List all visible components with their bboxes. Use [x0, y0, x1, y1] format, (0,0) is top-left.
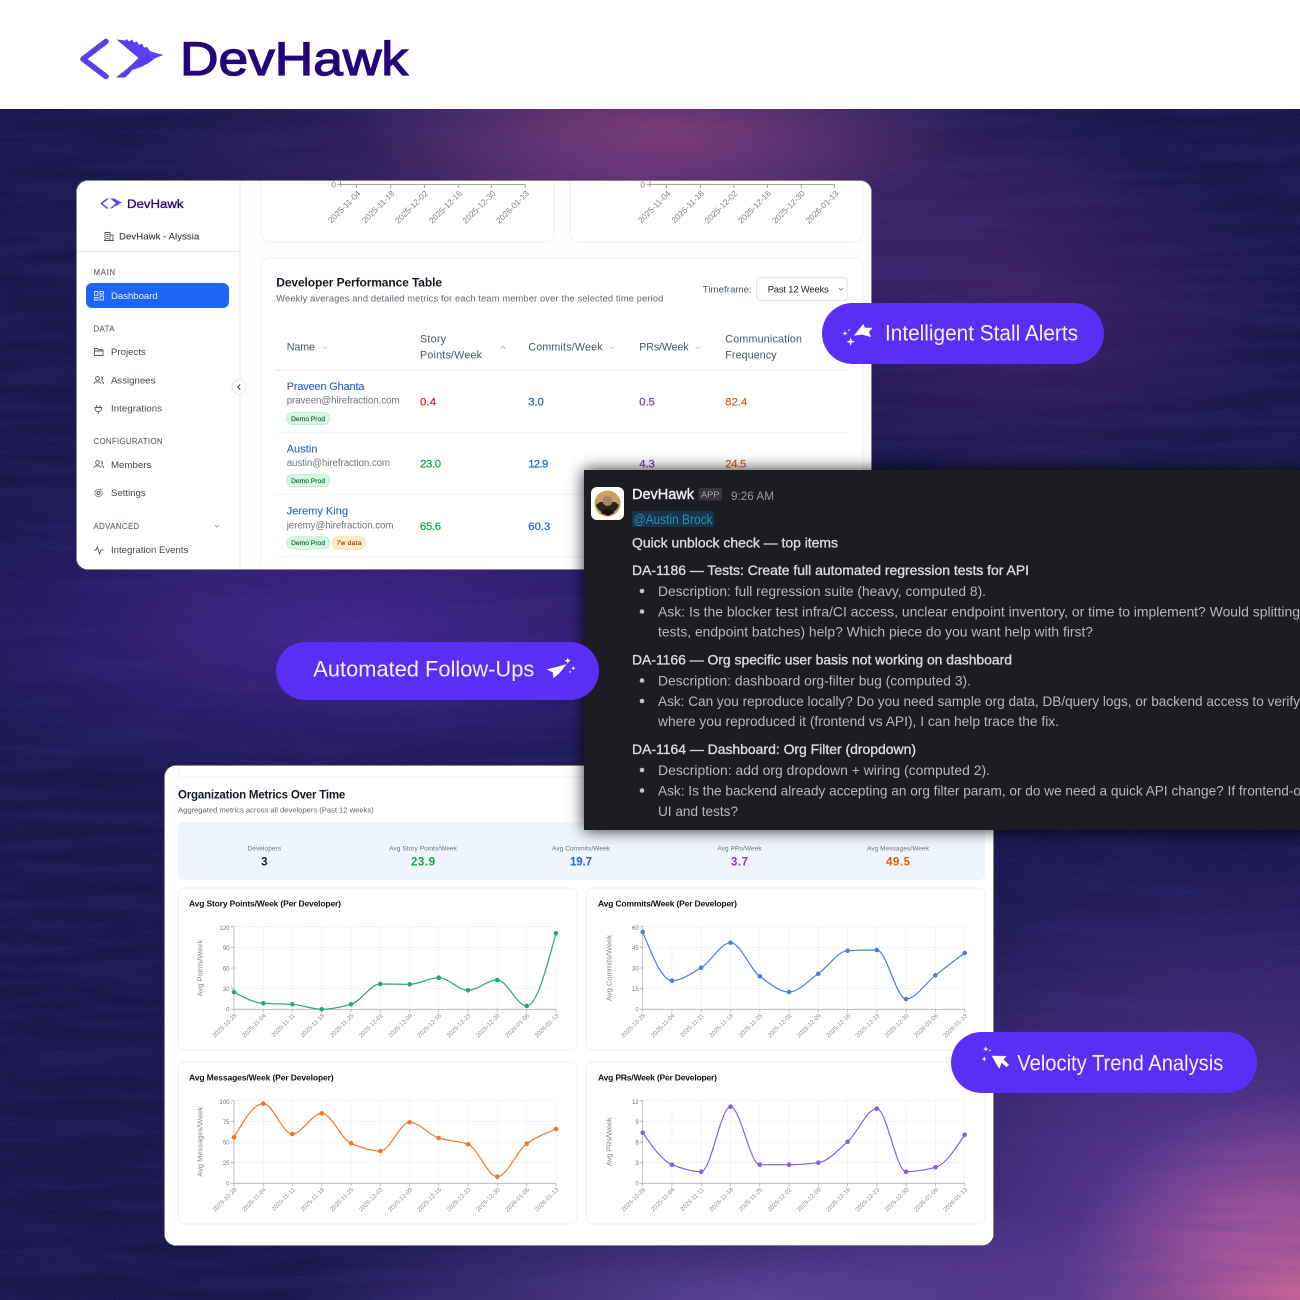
- timeframe select: Timeframe:: [703, 285, 752, 296]
- chart card: avg messages: 2025-11-18: [299, 1186, 327, 1213]
- nav item: Settings: [94, 488, 146, 498]
- stat: story points: [389, 846, 458, 869]
- table row: Austin: [276, 444, 746, 494]
- table description: Weekly averages and detailed metrics for each team member over the selected time period: [276, 294, 663, 304]
- sender line: 9:26 AM: [731, 489, 774, 503]
- table row: Praveen Ghanta: Praveen Ghanta: [287, 381, 365, 393]
- chart card: avg PRs: 12: [632, 1100, 639, 1106]
- chart card: avg PRs: 6: [635, 1140, 639, 1146]
- ticket DA-1186: Ask: Is the blocker test infra/CI access, unclear endpoint inventory, or time to implement? Would splitting: [658, 604, 1300, 620]
- wordmark: DevHawk: [180, 32, 409, 85]
- stat: developers: 3: [261, 857, 268, 869]
- chart card: avg commits: 15: [632, 987, 639, 993]
- collapse button: [232, 380, 246, 394]
- chart card: avg story points: 2025-11-25: [329, 1012, 356, 1039]
- nav item: Assignees: Assignees: [111, 376, 156, 386]
- chart stub: right card axis: 2026-01-13: [803, 188, 841, 225]
- table row: Jeremy King: 7w data: [336, 540, 362, 547]
- ticket DA-1166: where you reproduced it (frontend vs API), I can help trace the fix.: [657, 713, 1059, 729]
- chart stub: left card axis: 2025-11-18: [360, 188, 397, 225]
- chart card: avg story points: 120: [219, 926, 230, 932]
- chart card: avg commits: 45: [632, 946, 639, 952]
- stat: story points: Avg Story Points/Week: [389, 846, 458, 853]
- chart stub: right card axis: 2025-11-18: [669, 188, 706, 225]
- panel: dashboard table window: [76, 180, 872, 570]
- chart card: avg story points: 2025-11-11: [270, 1012, 297, 1039]
- nav heading with chevron: [93, 522, 220, 530]
- chart card: avg messages: 100: [219, 1100, 230, 1106]
- chart card: avg story points: 2025-11-18: [299, 1012, 327, 1039]
- chart stub: left card axis: 2025-12-02: [393, 188, 430, 225]
- table header row: Communication: [725, 334, 802, 346]
- ticket DA-1186: [632, 562, 1300, 640]
- chart stub: right card axis: 2025-12-16: [736, 188, 773, 225]
- sender line: [632, 486, 774, 503]
- table header row: Commits/Week: [528, 342, 603, 354]
- summary band: [178, 822, 985, 880]
- ticket DA-1164: UI and tests?: [658, 803, 738, 819]
- table row: Austin: 23.0: [420, 459, 441, 471]
- nav item: Settings: Settings: [111, 488, 146, 499]
- chart card: avg commits: 2025-11-11: [679, 1012, 706, 1039]
- stat: PRs: 3.7: [731, 857, 748, 869]
- chart stub: right card axis: 2025-12-02: [702, 188, 740, 225]
- section description: Aggregated metrics across all developers (Past 12 weeks): [178, 805, 374, 814]
- table row: Praveen Ghanta: 0.5: [639, 397, 655, 409]
- chart card: avg messages: 2025-12-16: [416, 1186, 444, 1213]
- nav item: Projects: [94, 348, 146, 357]
- panel: Slack message: [584, 470, 1300, 830]
- table row: Jeremy King: [276, 506, 848, 557]
- nav heading: CONFIGURATION: [94, 437, 162, 446]
- chart card: avg PRs: 2025-12-23: [854, 1186, 882, 1213]
- chart card: avg story points: 2025-10-28: [211, 1012, 239, 1039]
- icon: sparkle arrow: [843, 324, 873, 346]
- chart card: avg PRs: 2025-11-25: [738, 1186, 765, 1213]
- bot avatar: [591, 487, 624, 520]
- nav item: Dashboard active: [86, 283, 229, 308]
- stat: commits: 19.7: [570, 857, 592, 869]
- table row: Austin: Austin: [287, 443, 317, 455]
- chart card: avg commits: 2026-01-13: [942, 1012, 970, 1039]
- chart card: avg messages: 2025-12-02: [358, 1186, 385, 1213]
- ticket DA-1164: Ask: Is the backend already accepting an org filter param, or do we need a quick API change? If frontend-o: [658, 782, 1300, 798]
- stat: story points: 23.9: [411, 857, 435, 869]
- nav item: Members: Members: [111, 460, 152, 471]
- stat: developers: Developers: [247, 846, 282, 853]
- chart card: avg commits: 2025-12-16: [825, 1012, 852, 1039]
- chart card: avg story points: 2025-12-16: [416, 1012, 444, 1039]
- chart stub: left card axis: 2025-12-16: [427, 188, 464, 225]
- ticket DA-1166: Description: dashboard org-filter bug (computed 3).: [658, 672, 971, 688]
- chart stub: left card axis: 2025-12-30: [460, 188, 498, 225]
- message intro: Quick unblock check — top items: [632, 534, 838, 550]
- chart card: avg story points: 2025-12-02: [358, 1012, 385, 1039]
- stat: developers: [247, 846, 282, 869]
- ticket DA-1166: [632, 652, 1300, 729]
- mention: @Austin Brock: [634, 511, 713, 527]
- callout: Intelligent Stall Alerts: Intelligent Stall Alerts: [885, 321, 1078, 346]
- panel: developer performance table: [261, 258, 863, 598]
- table row: Praveen Ghanta: praveen@hirefraction.com: [287, 396, 399, 407]
- ticket DA-1164: Description: add org dropdown + wiring (computed 2).: [658, 762, 990, 778]
- table row: Praveen Ghanta: 82.4: [725, 397, 747, 409]
- chart card: avg messages: [178, 1062, 577, 1224]
- chart card: avg messages: 2025-12-23: [445, 1186, 473, 1213]
- table row: Austin: 12.9: [528, 459, 548, 471]
- table row: Praveen Ghanta: Demo Prod: [291, 416, 325, 423]
- ticket DA-1186: Description: full regression suite (heavy, computed 8).: [658, 583, 986, 599]
- table row: Austin: 24.5: [725, 459, 746, 471]
- table row: Austin: austin@hirefraction.com: [287, 458, 390, 469]
- chart card: avg commits: 2025-11-04: [650, 1012, 677, 1039]
- nav item: Assignees: [94, 376, 155, 386]
- ticket DA-1166: DA-1166 — Org specific user basis not working on dashboard: [632, 652, 1012, 668]
- chart card: avg messages: 25: [223, 1161, 230, 1167]
- chart card: avg commits: 2025-12-09: [796, 1012, 823, 1039]
- ticket DA-1166: Ask: Can you reproduce locally? Do you need sample org data, DB/query logs, or backend access to verify: [658, 693, 1300, 709]
- chart card: avg story points: [178, 888, 577, 1050]
- table row: Jeremy King: 60.3: [528, 521, 550, 533]
- nav heading: MAIN: [94, 268, 115, 277]
- chart card: avg PRs: 2025-12-02: [766, 1186, 794, 1213]
- chart card: avg PRs: Avg PRs/Week (Per Developer): [598, 1073, 717, 1083]
- chart card: avg messages: 2025-11-04: [241, 1186, 268, 1213]
- table row: Austin: Demo Prod: [291, 478, 325, 485]
- chart card: avg commits: Avg Commits/Week: [604, 935, 614, 1001]
- chart card: avg messages: 50: [223, 1140, 230, 1146]
- panel: organization metrics window: [164, 740, 994, 1246]
- chart stub: left card axis: 0: [331, 180, 336, 190]
- chart card: avg story points: Avg Points/Week: [196, 939, 204, 996]
- chart card: avg messages: 2025-12-09: [387, 1186, 415, 1213]
- nav item: Members: [94, 460, 151, 468]
- chart card: avg story points: 2025-12-09: [387, 1012, 415, 1039]
- table row: Jeremy King: jeremy@hirefraction.com: [286, 520, 393, 531]
- chart card: avg story points: 0: [226, 1008, 230, 1014]
- table row: Jeremy King: Demo Prod: [291, 540, 325, 547]
- table header row: PRs/Week: [639, 342, 689, 354]
- chart card: avg messages: 2025-12-30: [475, 1186, 502, 1213]
- table row: Austin: 4.3: [639, 459, 655, 471]
- chart card: avg story points: 2025-12-23: [445, 1012, 473, 1039]
- chart card: avg messages: 2026-01-13: [533, 1186, 561, 1213]
- chart card: avg messages: 2026-01-06: [504, 1186, 532, 1213]
- window border: [164, 765, 994, 1246]
- timeframe select: Past 12 Weeks: [768, 284, 829, 295]
- stat: messages: Avg Messages/Week: [867, 846, 930, 853]
- chart card: avg commits: 2025-12-02: [766, 1012, 794, 1039]
- chart stub: left card axis: 2025-11-04: [326, 188, 363, 225]
- callout: Velocity Trend Analysis: Velocity Trend Analysis: [1017, 1051, 1223, 1076]
- sidebar logo: [100, 198, 184, 209]
- chart stub: left card axis: 2026-01-13: [494, 188, 531, 225]
- chart card: avg commits: Avg Commits/Week (Per Developer): [598, 899, 737, 909]
- icon: sparkle arrow: [982, 1046, 1009, 1069]
- nav heading: DATA: [94, 324, 115, 334]
- chart card: avg PRs: 2025-12-16: [825, 1186, 852, 1213]
- chart card: avg PRs: 9: [635, 1120, 639, 1126]
- chart card: avg story points: 2025-11-04: [241, 1012, 268, 1039]
- chart stub: right card axis: 0: [640, 180, 645, 190]
- sidebar logo: DevHawk: [127, 199, 184, 211]
- nav heading with chevron: ADVANCED: [94, 522, 140, 531]
- chart card: avg commits: 2025-12-30: [884, 1012, 911, 1039]
- chart card: avg commits: 2025-11-25: [738, 1012, 765, 1039]
- header band with logo: [0, 0, 1300, 109]
- ticket DA-1164: DA-1164 — Dashboard: Org Filter (dropdown): [632, 741, 916, 757]
- chart card: avg messages: 2025-11-11: [270, 1186, 297, 1213]
- table row: Jeremy King: Jeremy King: [287, 506, 348, 518]
- chart card: avg commits: 2026-01-06: [913, 1012, 940, 1039]
- chart card: avg PRs: 2025-12-09: [796, 1186, 823, 1213]
- chart card: avg PRs: 2026-01-06: [913, 1186, 940, 1213]
- chart card: avg PRs: 2025-11-11: [679, 1186, 706, 1213]
- sender line: DevHawk: [632, 486, 694, 503]
- stat: messages: [867, 846, 930, 869]
- chart stub: right card axis: [570, 180, 864, 242]
- chart card: avg messages: 2025-11-25: [329, 1186, 356, 1213]
- stat: PRs: [718, 846, 762, 869]
- chart card: avg commits: 30: [632, 966, 639, 972]
- chart card: avg messages: 75: [223, 1120, 230, 1126]
- chart card: avg commits: 2025-10-28: [620, 1012, 648, 1039]
- timeframe select: [703, 277, 847, 301]
- chart card: avg PRs: 2025-11-18: [708, 1186, 735, 1213]
- section heading: Organization Metrics Over Time: [178, 790, 345, 802]
- icon: sparkle arrow: [547, 658, 575, 678]
- callout: Intelligent Stall Alerts: [822, 303, 1104, 364]
- table header row: [276, 334, 848, 370]
- chart card: avg commits: [586, 888, 985, 1050]
- ticket DA-1164: [632, 741, 1300, 819]
- stat: messages: 49.5: [886, 857, 911, 869]
- chart card: avg PRs: 3: [635, 1161, 639, 1167]
- chart card: avg messages: 0: [226, 1182, 230, 1188]
- chart card: avg messages: Avg Messages/Week: [196, 1106, 204, 1177]
- chart card: avg messages: Avg Messages/Week (Per Developer): [189, 1073, 334, 1083]
- chart card: avg story points: 90: [223, 946, 230, 952]
- chart card: avg PRs: 2025-10-28: [620, 1186, 648, 1213]
- chart card: avg story points: 2026-01-13: [533, 1012, 561, 1039]
- ticket DA-1186: tests, endpoint batches) help? Which piece do you want help with first?: [658, 624, 1093, 640]
- nav item: Integrations: [94, 405, 162, 414]
- callout: Automated Follow-Ups: Automated Follow-Ups: [313, 657, 534, 682]
- stat: commits: [552, 846, 611, 869]
- window border: [76, 180, 872, 570]
- callout: Velocity Trend Analysis: [951, 1032, 1257, 1093]
- chart card: avg PRs: [586, 1062, 985, 1224]
- chart card: avg PRs: 2025-11-04: [650, 1186, 677, 1213]
- sender line: APP: [701, 490, 720, 500]
- table header row: Story: [420, 334, 447, 346]
- nav item: Dashboard active: Dashboard: [111, 291, 158, 302]
- chart card: avg story points: 30: [223, 987, 230, 993]
- chart card: avg PRs: 0: [635, 1182, 639, 1188]
- chart card: avg story points: 60: [223, 966, 230, 972]
- chart card: avg PRs: Avg PRs/Week: [604, 1117, 614, 1166]
- chart card: avg commits: 2025-11-18: [708, 1012, 735, 1039]
- nav item: Projects: Projects: [111, 347, 146, 358]
- nav item: Integration Events: Integration Events: [111, 545, 189, 556]
- chart stub: right card axis: 2025-11-04: [636, 188, 673, 225]
- ticket DA-1186: DA-1186 — Tests: Create full automated regression tests for API: [632, 562, 1029, 578]
- chart card: avg story points: Avg Story Points/Week (Per Developer): [189, 899, 341, 909]
- chart stub: left card axis: [260, 180, 554, 242]
- nav item: Integrations: Integrations: [111, 404, 162, 414]
- chart card: avg messages: 2025-10-28: [211, 1186, 239, 1213]
- table row: Jeremy King: 65.6: [420, 521, 441, 533]
- table row: Praveen Ghanta: 3.0: [528, 397, 544, 409]
- chart card: avg commits: 0: [635, 1008, 639, 1014]
- table header row: Name: [287, 342, 315, 354]
- chart card: avg commits: 2025-12-23: [854, 1012, 882, 1039]
- icon: hawk code mark: [83, 39, 164, 78]
- workspace name: DevHawk - Alyssia: [119, 232, 200, 242]
- stat: commits: Avg Commits/Week: [552, 846, 611, 853]
- table header row: Frequency: [725, 349, 777, 361]
- chart card: avg story points: 2026-01-06: [504, 1012, 532, 1039]
- chart card: avg PRs: 2025-12-30: [884, 1186, 911, 1213]
- table row: Praveen Ghanta: [276, 381, 848, 432]
- callout: Automated Follow-Ups: [276, 642, 599, 700]
- chart card: avg story points: 2025-12-30: [475, 1012, 502, 1039]
- table row: Praveen Ghanta: 0.4: [420, 397, 436, 409]
- panel: sidebar: [76, 180, 246, 570]
- stat: PRs: Avg PRs/Week: [718, 846, 762, 853]
- chart stub: right card axis: 2025-12-30: [770, 188, 807, 225]
- table heading: Developer Performance Table: [276, 276, 442, 290]
- chart card: avg commits: 60: [632, 926, 639, 932]
- table header row: Points/Week: [420, 349, 483, 361]
- chart card: avg PRs: 2026-01-13: [942, 1186, 970, 1213]
